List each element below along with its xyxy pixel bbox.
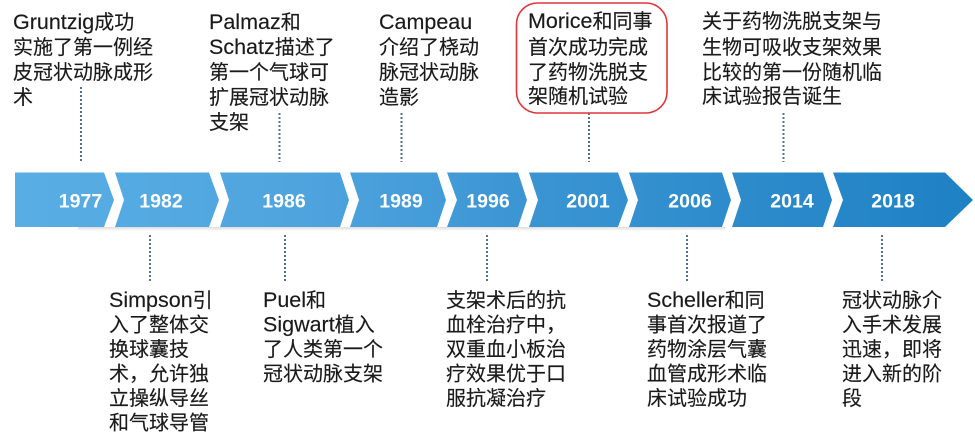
text: 2018 event: 段 [842,387,862,410]
text: 2018 event: 迅速，即将 [842,338,942,361]
text: 1986 Puel event: 了人类第一个 [263,338,383,361]
chevron: 1982: 1982 [139,190,183,212]
connector: 2014 [782,113,784,162]
text: 1996 event: 支架术后的抗 [446,289,566,312]
callout: 2001 highlighted event: Morice和同事 [528,9,653,33]
chevron: 1996 [447,172,527,227]
text: 1982 event: 换球囊技 [109,338,189,361]
chevron: 2018: 2018 [871,190,915,212]
chevron: 2014: 2014 [770,190,814,212]
text: 1977 event: 实施了第一例经 [13,36,153,59]
text: 2006 event: 血管成形术临 [647,362,767,386]
connector: 2001 [588,113,590,162]
chevron: 2006: 2006 [668,190,712,212]
text: 1996 event: 血栓治疗中， [446,314,566,336]
chevron: 1977 [15,172,114,227]
connector: 1989 [400,113,402,162]
text: 1986 Palmaz event: 第一个气球可 [209,61,329,84]
text: 2018 event: 入手术发展 [842,314,942,336]
text: 1986 Palmaz event: 扩展冠状动脉 [209,86,329,109]
callout: 2001 highlighted event: 首次成功完成 [528,36,648,59]
connector: 2018 [881,235,883,281]
text: 2006 event: 药物涂层气囊 [647,338,767,361]
chevron: 2001: 2001 [566,190,610,212]
text: 1986 Puel event: Puel和 [263,288,326,312]
text: 1986 Palmaz event: 支架 [209,111,249,134]
chevron: 1989: 1989 [379,190,423,212]
text: 1977 event: 皮冠状动脉成形 [13,61,153,84]
chevron: 1982 [115,172,219,227]
text: 1977 event: Gruntzig成功 [13,10,134,34]
connector: 1986 top [278,113,280,162]
chevron: 1986 [220,172,349,227]
text: 1989 event: 介绍了桡动 [379,36,479,59]
chevron: 1996: 1996 [466,190,510,212]
chevron: 1977: 1977 [59,190,102,212]
chevron: 2006 [629,172,731,227]
text: 1986 Puel event: Sigwart植入 [263,312,375,336]
connector: 1982 [149,235,151,281]
connector: 1996 [486,235,488,281]
text: 2018 event: 进入新的阶 [842,362,942,386]
text: 1989 event: 脉冠状动脉 [379,61,479,84]
text: 1996 event: 双重血小板治 [446,338,566,361]
chevron: 2018 [833,172,973,227]
text: 1982 event: 立操纵导丝 [109,387,209,410]
text: 1982 event: 和气球导管 [109,412,209,434]
text: 1996 event: 疗效果优于口 [446,362,566,386]
chevron: 2014 [732,172,832,227]
connector: 1977 [80,87,82,162]
text: 1986 Palmaz event: Palmaz和 [209,10,301,34]
text: 1986 Puel event: 冠状动脉支架 [263,362,383,386]
callout: 2001 highlighted event [516,3,667,113]
text: 2014 event: 床试验报告诞生 [702,85,842,108]
chevron: 2001 [529,172,628,227]
text: 1989 event: Campeau [379,10,472,34]
connector: 1986 bottom [284,235,286,281]
text: 2006 event: 事首次报道了 [647,314,767,336]
text: 1982 event: 入了整体交 [109,314,209,336]
text: 2006 event: Scheller和同 [647,288,765,312]
chevron: 1986: 1986 [262,190,306,212]
text: 2014 event: 比较的第一份随机临 [702,61,882,84]
text: 2014 event: 关于药物洗脱支架与 [702,10,882,33]
text: 1986 Palmaz event: Schatz描述了 [209,35,335,59]
callout: 2001 highlighted event: 了药物洗脱支 [528,61,648,84]
timeline ribbon [15,172,973,227]
callout: 2001 highlighted event: 架随机试验 [528,85,628,108]
text: 1996 event: 服抗凝治疗 [446,387,546,410]
chevron: 1989 [350,172,446,227]
text: 2006 event: 床试验成功 [647,387,747,410]
connector: 2006 [686,235,688,281]
text: 2014 event: 生物可吸收支架效果 [702,36,882,59]
text: 2018 event: 冠状动脉介 [842,289,942,312]
text: 1977 event: 术 [13,86,33,109]
ribbon shadow [78,227,725,231]
text: 1982 event: 术，允许独 [109,362,209,386]
text: 1989 event: 造影 [379,86,419,109]
text: 1982 event: Simpson引 [109,288,213,312]
